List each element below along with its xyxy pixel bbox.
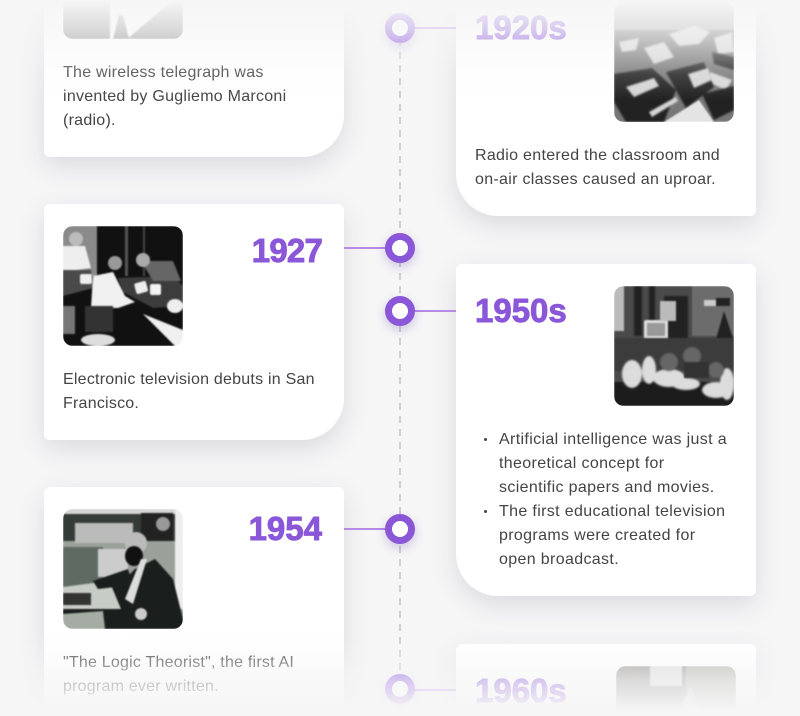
description: "The Logic Theorist", the first AI [63, 654, 294, 671]
node: 1954 [385, 514, 415, 544]
node: 1927 [385, 233, 415, 263]
node: 1960s [385, 674, 415, 704]
photo: 1960s [616, 666, 736, 704]
description [63, 64, 286, 129]
card: wireless telegraph [44, 0, 344, 157]
bullet list: The first educational television [499, 503, 725, 520]
top fade [0, 0, 800, 100]
bullet list: scientific papers and movies. [499, 479, 715, 496]
year: 1920s: 1920s [475, 9, 567, 46]
timeline axis [399, 43, 401, 670]
description: The wireless telegraph was [63, 64, 264, 81]
year: 1960s [475, 672, 567, 709]
year: 1950s [475, 292, 567, 329]
photo: television audience [614, 286, 734, 406]
description: on-air classes caused an uproar. [475, 171, 716, 188]
description: (radio). [63, 112, 116, 129]
description: Electronic television debuts in San [63, 371, 315, 388]
description: program ever written. [63, 678, 219, 695]
description [63, 654, 294, 695]
photo: classroom radio [614, 10, 734, 122]
description: Francisco. [63, 395, 139, 412]
card: 1954 [44, 487, 344, 716]
bullet [484, 438, 487, 441]
description: invented by Gugliemo Marconi [63, 88, 286, 105]
card: 1920s [456, 0, 756, 216]
bullet list: open broadcast. [499, 551, 619, 568]
card: 1927 [44, 204, 344, 440]
photo: telegraph [63, 8, 183, 39]
photo: television lab [63, 226, 183, 346]
connector: 1960s [414, 689, 456, 691]
connector: 1954 [344, 528, 386, 530]
bullet list: programs were created for [499, 527, 695, 544]
description: Radio entered the classroom and [475, 147, 720, 164]
node: 1950s [385, 296, 415, 326]
card: 1950s [456, 264, 756, 596]
description [63, 371, 315, 412]
bottom fade [0, 636, 800, 716]
description [475, 147, 720, 188]
connector: 1927 [344, 247, 386, 249]
bullet [484, 510, 487, 513]
connector: 1950s [414, 310, 456, 312]
photo: Logic Theorist [63, 509, 183, 629]
card: 1960s [456, 644, 756, 716]
year: 1927 [252, 232, 322, 269]
bullet list: Artificial intelligence was just a [499, 431, 727, 448]
connector: 1920s [414, 27, 456, 29]
node: 1920s [385, 13, 415, 43]
year: 1954 [249, 510, 322, 547]
bullet list: theoretical concept for [499, 455, 664, 472]
bullet list [484, 431, 727, 568]
